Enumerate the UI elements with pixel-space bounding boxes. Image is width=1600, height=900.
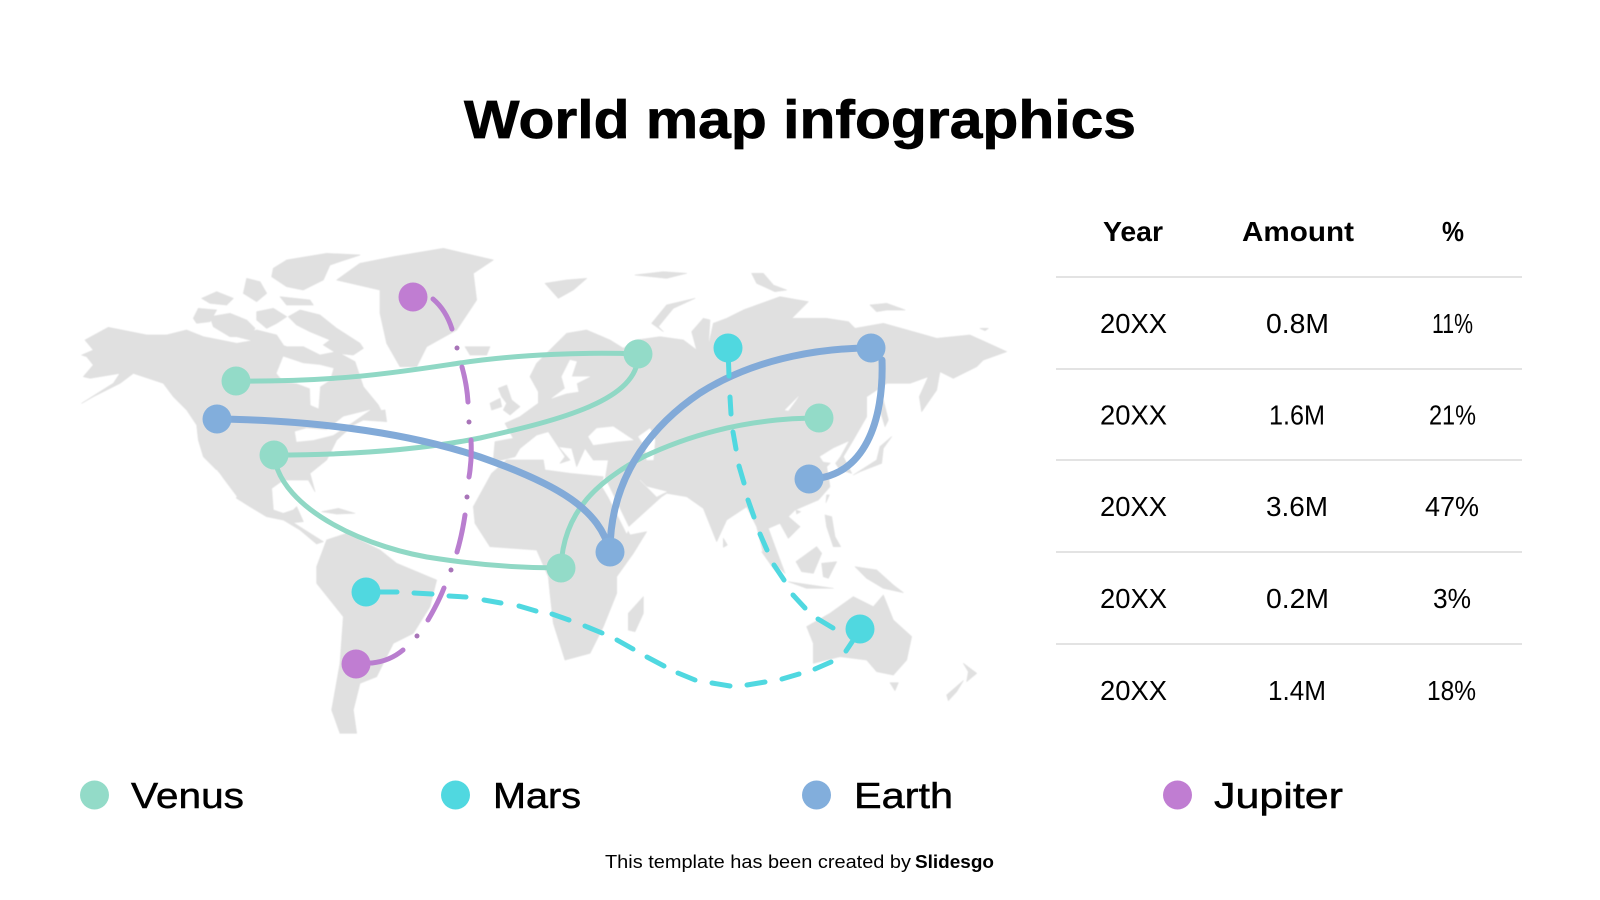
table rows: 47%	[1425, 491, 1479, 522]
legend: Mars: Mars	[493, 775, 581, 816]
legend: Mars	[441, 775, 581, 816]
routes: Jupiter dash-dot	[356, 299, 472, 663]
markers: Mars	[352, 334, 874, 644]
table rows: 20XX	[1100, 400, 1167, 430]
table header: Year	[1103, 216, 1163, 247]
legend: Jupiter: Jupiter	[1214, 775, 1343, 816]
table header	[1103, 216, 1464, 247]
world map	[82, 248, 1007, 733]
table rows: 18%	[1427, 675, 1476, 706]
map: Europe, Asia, Africa	[473, 272, 1007, 660]
table rows: 0.2M	[1266, 583, 1329, 614]
routes: Mars dashed	[366, 348, 860, 686]
map: North America and Arctic	[82, 253, 387, 544]
table rows: 3%	[1433, 583, 1471, 614]
map: Greenland, South America, islands	[317, 248, 493, 733]
data table	[1056, 216, 1522, 706]
markers: Jupiter	[342, 282, 428, 678]
legend: Jupiter	[1163, 775, 1343, 816]
table rows: 1.4M	[1268, 675, 1326, 706]
table header: Amount	[1242, 216, 1354, 247]
table rows: 20XX	[1100, 675, 1167, 706]
legend: Earth	[802, 775, 953, 816]
map: Oceania and Indian Ocean islands	[628, 538, 977, 701]
table rows: 1.6M	[1269, 400, 1325, 430]
title: World map infographics	[464, 90, 1136, 150]
legend: Venus: Venus	[131, 775, 244, 816]
markers: Venus	[222, 340, 834, 582]
table rows: 0.8M	[1266, 308, 1329, 339]
table rows: 20XX	[1100, 308, 1167, 339]
table rows: 21%	[1429, 400, 1476, 430]
table rows: 3.6M	[1266, 491, 1328, 522]
legend: Earth: Earth	[854, 775, 953, 816]
table rows: 20XX	[1100, 491, 1167, 522]
footer credit: Slidesgo	[915, 852, 994, 872]
table rows: 20XX	[1100, 583, 1167, 614]
table rows	[1100, 308, 1479, 706]
table header: %	[1442, 216, 1464, 247]
legend: Venus	[80, 775, 244, 816]
route lines and markers	[202, 282, 886, 686]
markers: Earth	[202, 334, 886, 566]
footer credit: This template has been created by	[605, 852, 911, 872]
legend	[80, 775, 1343, 816]
routes: Earth	[217, 348, 882, 552]
routes: Venus	[236, 353, 819, 568]
table rows: 11%	[1432, 308, 1473, 339]
